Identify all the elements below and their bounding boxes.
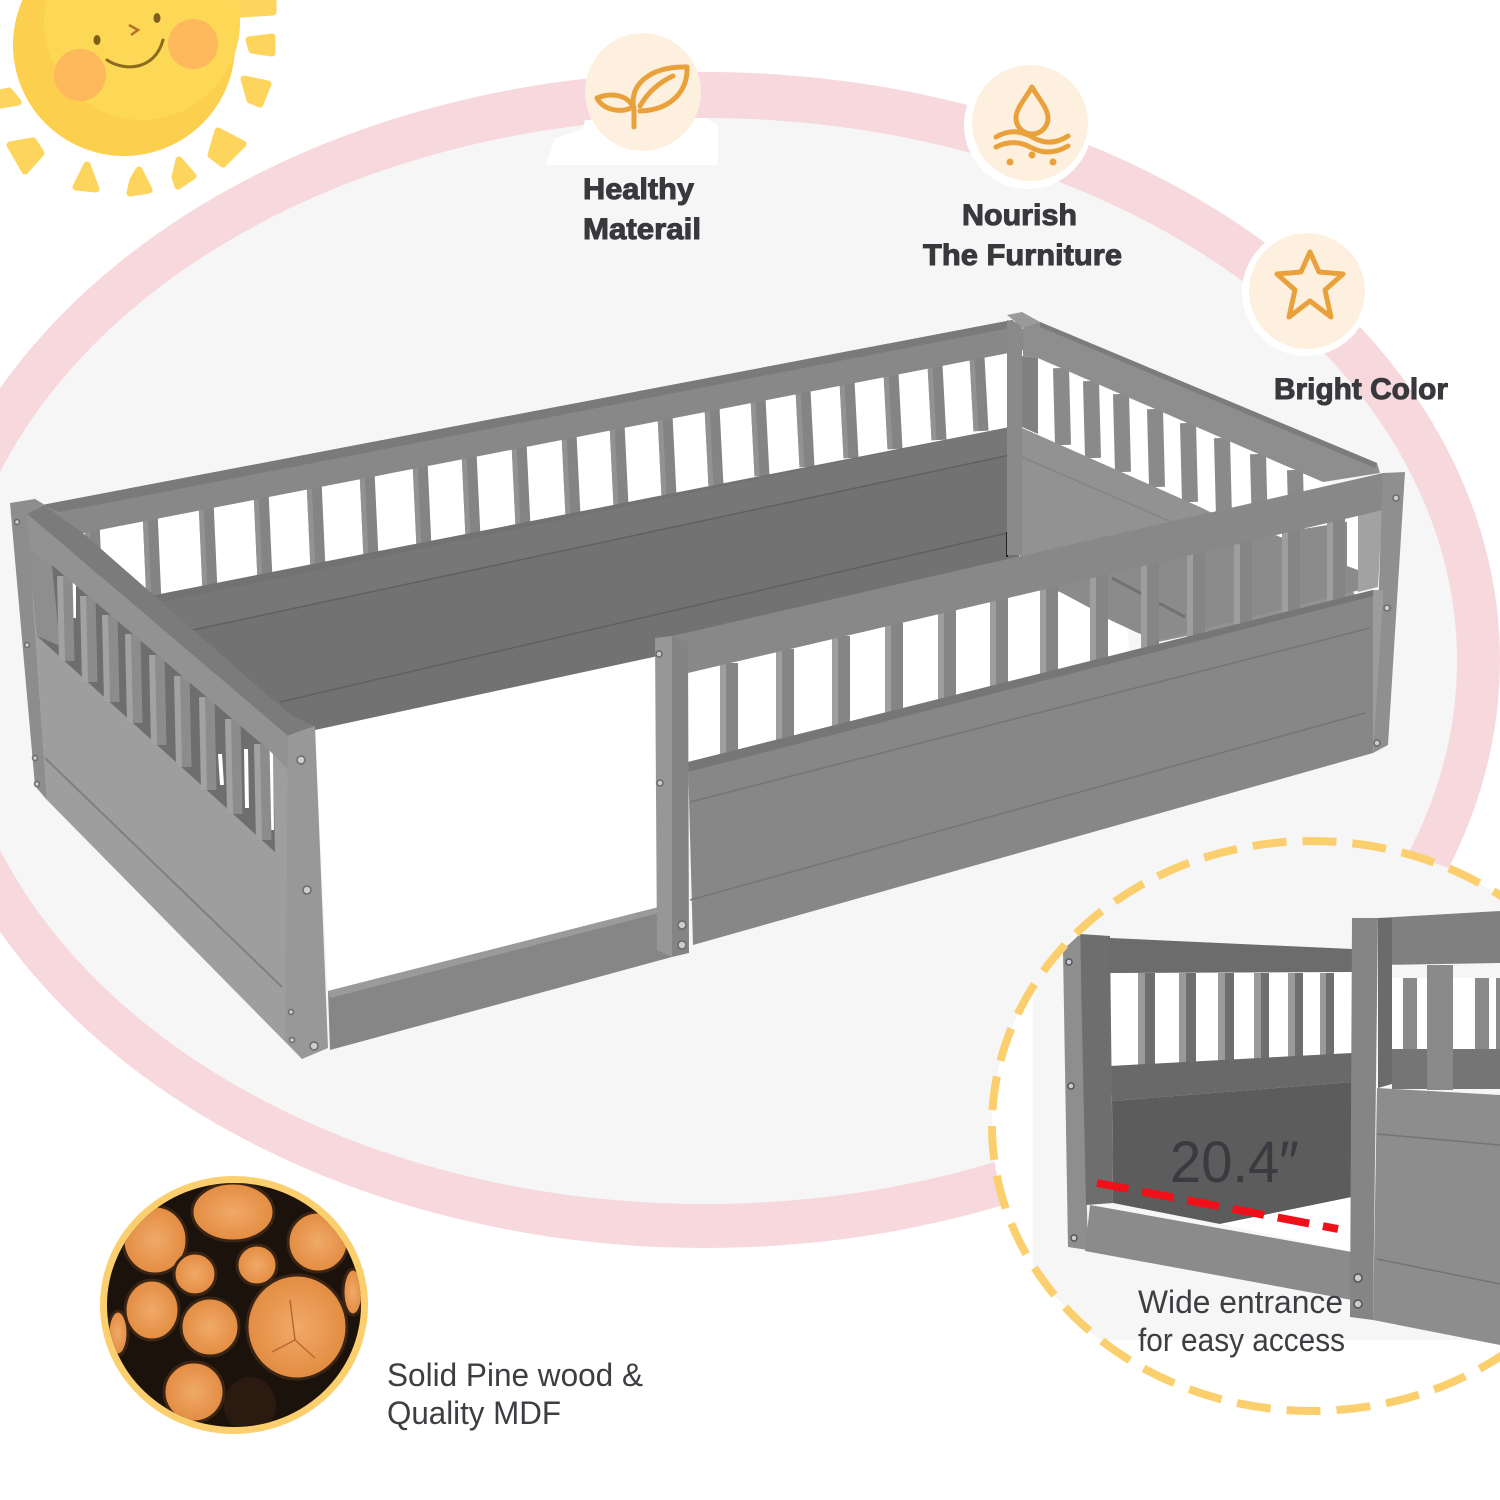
left wall window xyxy=(28,548,275,852)
bed interior deck xyxy=(150,426,1020,730)
bed white openings xyxy=(60,350,1345,992)
label: The Furniture xyxy=(923,239,1122,272)
feature: healthy material xyxy=(546,33,718,246)
icon: smiling sun xyxy=(0,0,273,193)
back slats xyxy=(87,357,981,615)
back right corner post xyxy=(1007,312,1040,555)
dimension text: 20.4″ xyxy=(1170,1130,1299,1195)
feature: nourish the furniture xyxy=(923,61,1122,272)
icon: leaf xyxy=(585,33,701,151)
label: Bright Color xyxy=(1274,373,1448,406)
label: Materail xyxy=(583,213,701,246)
inset front panel xyxy=(1373,1088,1500,1345)
right end slats xyxy=(1061,368,1297,550)
front lower panel xyxy=(688,590,1373,945)
back top rail xyxy=(42,320,1024,533)
left end wall xyxy=(10,499,328,1059)
right post xyxy=(285,726,328,1059)
wood caption: Quality MDF xyxy=(387,1395,561,1431)
left wall top rail xyxy=(27,514,288,770)
inset front post xyxy=(1350,918,1392,1320)
left post xyxy=(10,499,47,800)
front right corner post xyxy=(1373,472,1405,753)
right end interior panel xyxy=(1020,427,1358,642)
inset left post xyxy=(1063,934,1113,1250)
inset: wide entrance detail xyxy=(992,830,1500,1411)
right end top rail xyxy=(1023,322,1380,482)
front slats xyxy=(723,500,1383,758)
inset caption: Wide entrance xyxy=(1138,1284,1343,1320)
entrance post xyxy=(655,636,689,957)
front top rail xyxy=(672,473,1383,673)
label: Healthy xyxy=(583,173,694,206)
inset bottom rail xyxy=(1085,1205,1352,1300)
red dashed measure line xyxy=(1097,1183,1338,1229)
white patch behind icon xyxy=(546,118,718,165)
entrance bottom rail xyxy=(328,905,672,1050)
label: Nourish xyxy=(962,199,1077,232)
icon: water drop and waves xyxy=(964,61,1092,189)
icon: star xyxy=(1242,228,1370,356)
background pink ring xyxy=(0,72,1500,1248)
wood caption: Solid Pine wood & xyxy=(387,1357,643,1393)
feature: bright color xyxy=(1242,228,1448,406)
inset dashed ring xyxy=(992,841,1500,1411)
inset caption: for easy access xyxy=(1138,1322,1345,1358)
inset bolts xyxy=(1066,959,1362,1308)
inset right side slats xyxy=(1378,911,1500,1090)
inset far panel xyxy=(1110,938,1352,1252)
front window opening xyxy=(688,511,1360,765)
bed illustration xyxy=(10,312,1405,1059)
wood logs photo xyxy=(100,1176,368,1434)
bed bolts xyxy=(14,495,1399,1050)
